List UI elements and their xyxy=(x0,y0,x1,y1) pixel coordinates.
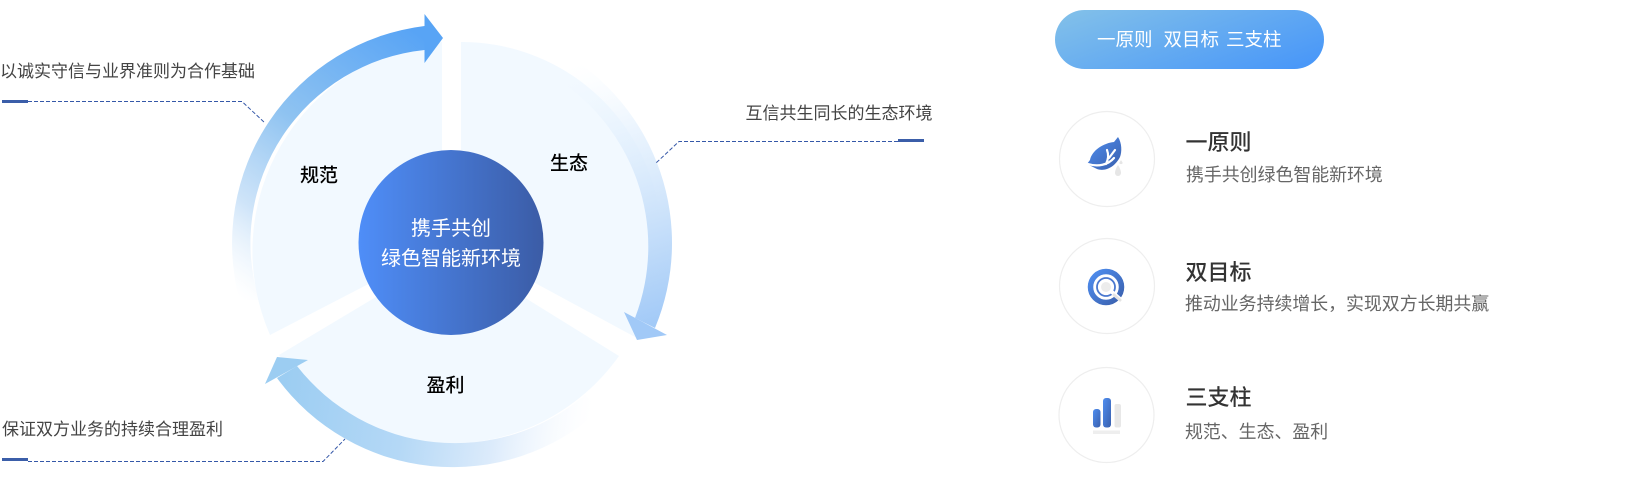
description: 规范、生态、盈利 xyxy=(1185,422,1328,442)
description: 推动业务持续增长，实现双方长期共赢 xyxy=(1185,293,1489,314)
sector: 盈利 xyxy=(279,252,619,444)
arrow: top left xyxy=(232,14,443,300)
sector label: 规范: 规范 xyxy=(300,164,338,186)
title: 三支柱 xyxy=(1186,385,1252,410)
callout: 保证双方: 保证双方业务的持续合理盈利 xyxy=(2,420,223,439)
sector: 生态 xyxy=(461,42,662,338)
callout: 保证双方 xyxy=(2,420,345,462)
title: 双目标 xyxy=(1186,260,1252,285)
arrow: bottom xyxy=(265,357,600,467)
sector label: 生态: 生态 xyxy=(550,152,588,174)
sector label: 盈利: 盈利 xyxy=(426,374,465,396)
center circle xyxy=(358,150,544,335)
description: 携手共创绿色智能新环境 xyxy=(1186,165,1383,185)
heading pill: 一原则 xyxy=(1097,29,1153,50)
center circle: 绿色智能新环境 xyxy=(381,247,521,270)
arrow: right xyxy=(548,52,672,340)
callout: 互信共生 xyxy=(656,104,932,163)
icon: target xyxy=(1090,272,1122,302)
item: 三支柱 xyxy=(1059,368,1328,462)
sector: 规范 xyxy=(252,42,442,335)
cycle diagram xyxy=(232,14,672,467)
icon: bars xyxy=(1093,398,1121,434)
callout: 以诚实守信: 以诚实守信与业界准则为合作基础 xyxy=(0,62,255,81)
center circle: 携手共创 xyxy=(411,217,491,240)
callout: 以诚实守信 xyxy=(0,62,265,123)
heading pill: 三支柱 xyxy=(1226,29,1282,50)
heading pill xyxy=(1055,10,1324,69)
icon: leaf xyxy=(1087,137,1123,176)
title: 一原则 xyxy=(1186,130,1252,155)
callout: 互信共生: 互信共生同长的生态环境 xyxy=(746,104,932,123)
item: 双目标 xyxy=(1060,238,1489,334)
item: 一原则 xyxy=(1060,112,1383,206)
heading pill: 双目标 xyxy=(1164,29,1219,50)
